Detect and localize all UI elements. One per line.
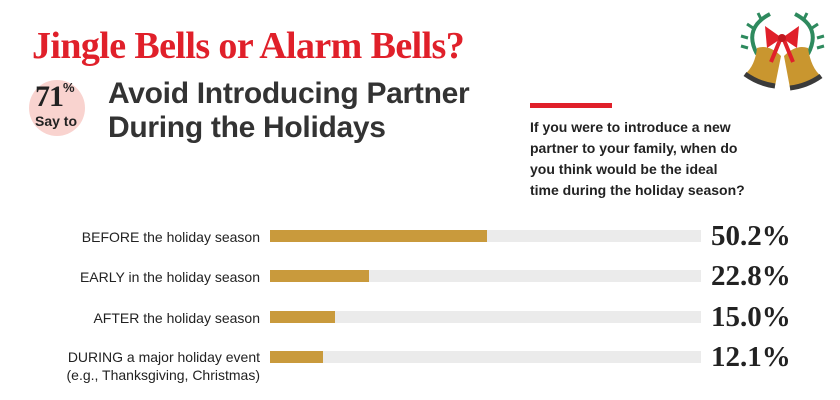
- subtitle: [108, 77, 470, 144]
- subtitle: During the Holidays: [108, 111, 386, 144]
- row: during: [67, 341, 791, 383]
- question text: you think would be the ideal: [530, 161, 717, 177]
- badge: 71% say to: 71%: [35, 80, 75, 113]
- question text: time during the holiday season?: [530, 182, 745, 198]
- row: after: AFTER the holiday season: [93, 310, 260, 326]
- row: after: [93, 301, 791, 333]
- row: during: (e.g., Thanksgiving, Christmas): [67, 367, 260, 383]
- row: before: BEFORE the holiday season: [82, 229, 260, 245]
- badge: 71% say to: Say to: [35, 113, 77, 129]
- icon: bells with wreath: [740, 12, 824, 90]
- row: during: DURING a major holiday event: [68, 349, 260, 365]
- question text: [530, 119, 745, 198]
- row: before: 50.2%: [711, 220, 791, 252]
- row: before: [82, 220, 791, 252]
- row: early: EARLY in the holiday season: [80, 269, 260, 285]
- red accent bar: [530, 103, 612, 108]
- row: during: 12.1%: [711, 341, 791, 373]
- row: after: 15.0%: [711, 301, 791, 333]
- title: Jingle Bells or Alarm Bells?: [32, 25, 464, 67]
- row: early: 22.8%: [711, 260, 791, 292]
- question text: If you were to introduce a new: [530, 119, 731, 135]
- subtitle: Avoid Introducing Partner: [108, 77, 469, 110]
- badge: 71% say to: [29, 80, 85, 136]
- question text: partner to your family, when do: [530, 140, 737, 156]
- row: early: [80, 260, 791, 292]
